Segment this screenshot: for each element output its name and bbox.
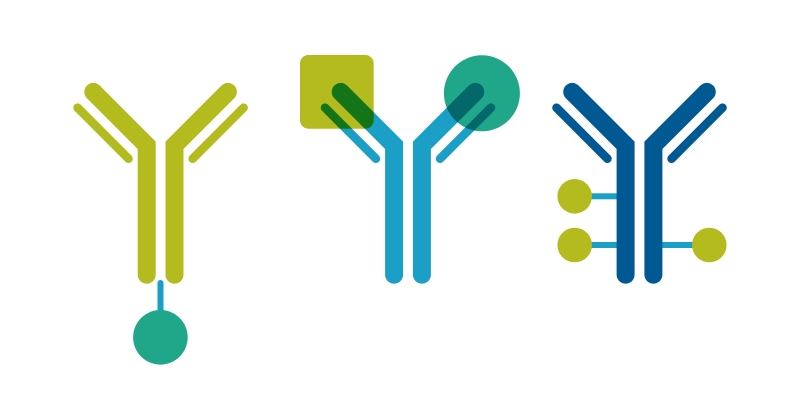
olive rounded square antigen bbox=[300, 55, 374, 129]
blue heavy and light chains bbox=[325, 92, 491, 275]
blue linker stem bbox=[158, 283, 164, 320]
antibody 3: dark blue antibody with conjugated payloads bbox=[556, 92, 727, 275]
blue connector lines bbox=[585, 193, 700, 248]
olive payload circles bbox=[557, 179, 727, 262]
antibody 1: olive antibody with teal payload on stem bbox=[78, 92, 244, 365]
antibody 2: blue antibody with two antigen shapes bbox=[300, 55, 520, 275]
teal circle payload bbox=[133, 310, 188, 365]
teal circle antigen bbox=[444, 55, 520, 131]
olive heavy and light chains bbox=[78, 92, 244, 275]
dark blue heavy and light chains bbox=[556, 92, 722, 275]
